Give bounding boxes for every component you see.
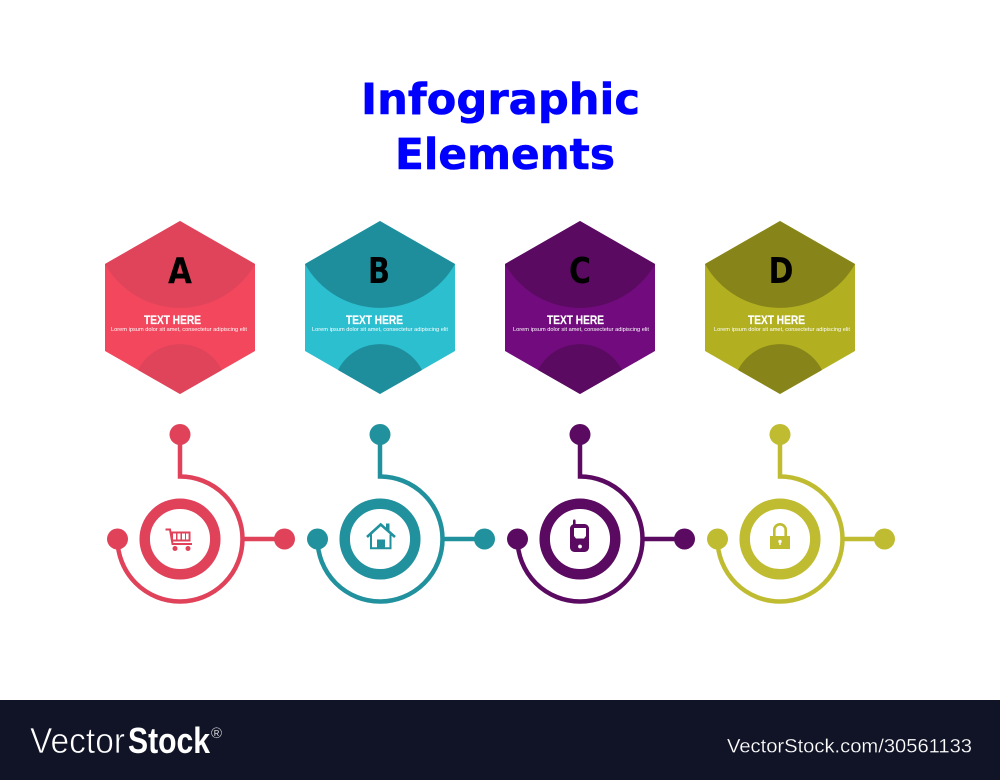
diagram: circuit B with house bbox=[307, 424, 495, 602]
heading A: TEXT HERE bbox=[144, 313, 201, 327]
heading B: TEXT HERE bbox=[346, 313, 403, 327]
description C: Lorem ipsum dolor sit amet, consectetur adipiscing elit bbox=[513, 327, 649, 333]
panel: hexagon D bbox=[705, 221, 855, 394]
letter C: C bbox=[569, 251, 591, 292]
heading D: TEXT HERE bbox=[748, 313, 805, 327]
icon: mobile phone bbox=[570, 520, 589, 552]
panel: hexagon A bbox=[105, 221, 255, 394]
description B: Lorem ipsum dolor sit amet, consectetur adipiscing elit bbox=[312, 327, 448, 333]
description A: Lorem ipsum dolor sit amet, consectetur adipiscing elit bbox=[111, 327, 247, 333]
diagram: circuit D with padlock bbox=[707, 424, 895, 602]
logo bbox=[30, 720, 222, 761]
panel: hexagon C bbox=[505, 221, 655, 394]
footer bar bbox=[0, 700, 1000, 780]
icon: padlock bbox=[770, 524, 790, 549]
logo: ® bbox=[211, 725, 222, 742]
panel: hexagon B bbox=[305, 221, 455, 394]
letter D: D bbox=[768, 251, 794, 292]
title: Elements bbox=[395, 130, 615, 180]
icon: house bbox=[367, 524, 395, 548]
image id: VectorStock.com/30561133 bbox=[727, 736, 972, 758]
diagram: circuit C with phone bbox=[507, 424, 695, 602]
logo: Vector bbox=[30, 720, 125, 761]
letter A: A bbox=[168, 251, 192, 292]
diagram: circuit A with cart bbox=[107, 424, 295, 602]
logo: Stock bbox=[128, 720, 211, 761]
title: Infographic bbox=[361, 75, 640, 125]
icon: shopping cart bbox=[166, 530, 192, 551]
heading C: TEXT HERE bbox=[547, 313, 604, 327]
title bbox=[361, 75, 640, 180]
description D: Lorem ipsum dolor sit amet, consectetur adipiscing elit bbox=[714, 327, 850, 333]
letter B: B bbox=[368, 251, 390, 292]
